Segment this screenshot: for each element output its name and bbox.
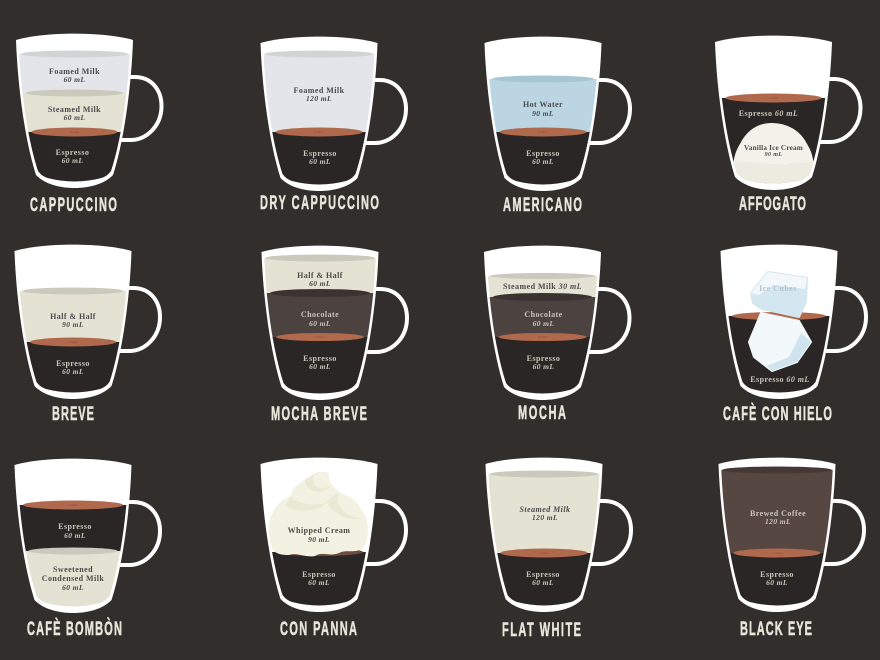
- mug: cappuccino: Espresso: [56, 148, 89, 157]
- mug: affogato: 90 mL: [765, 152, 782, 158]
- mug: cafe bombon: 60 mL: [62, 583, 84, 592]
- mug: black eye: 60 mL: [766, 578, 788, 587]
- mug: mocha breve: Half & Half: [297, 271, 343, 280]
- mug: mocha breve: 60 mL: [309, 362, 331, 371]
- title: dry cappuccino: DRY CAPPUCCINO: [260, 193, 379, 214]
- mug: dry cappuccino: 120 mL: [306, 94, 332, 103]
- mug: breve: Crema: [68, 340, 78, 344]
- mug: mocha breve: Crema: [315, 335, 325, 339]
- title: black eye: BLACK EYE: [740, 619, 812, 640]
- icon: ice cubes: [749, 272, 811, 371]
- mug: dry cappuccino: 60 mL: [309, 157, 331, 166]
- mug: dry cappuccino: Foamed Milk: [294, 86, 345, 95]
- mug: dry cappuccino: Crema: [314, 130, 324, 134]
- mug: affogato: [714, 36, 860, 193]
- mug: mocha breve: [260, 246, 407, 402]
- mug: black eye: [717, 458, 864, 615]
- mug: cafe bombon: Espresso: [58, 522, 92, 531]
- mug: cappuccino: Steamed Milk: [48, 105, 101, 114]
- title: breve: BREVE: [52, 404, 94, 425]
- mug: mocha breve: 60 mL: [309, 319, 331, 328]
- mug: americano: Espresso: [526, 149, 560, 158]
- mug: mocha: Espresso: [527, 354, 560, 363]
- mug: con panna: Whipped Cream: [288, 526, 350, 535]
- title: flat white: FLAT WHITE: [502, 620, 581, 641]
- title: con panna: CON PANNA: [280, 619, 357, 640]
- mug: breve: Half & Half: [50, 312, 96, 321]
- mug: cafe bombon: 60 mL: [64, 531, 86, 540]
- mug: flat white: [484, 458, 631, 615]
- title: affogato: AFFOGATO: [739, 194, 806, 215]
- icon: vanilla ice cream scoop: [734, 123, 814, 184]
- mug: black eye: Brewed Coffee: [750, 509, 806, 518]
- mug: mocha: [482, 246, 630, 402]
- title: cappuccino: CAPPUCCINO: [30, 195, 117, 216]
- mug: mocha breve: 60 mL: [309, 279, 331, 288]
- mug: mocha: Chocolate: [524, 310, 563, 319]
- mug: breve: Espresso: [56, 359, 90, 368]
- title: americano: AMERICANO: [503, 195, 582, 216]
- mug: flat white: Crema: [539, 551, 549, 555]
- mug: cafe bombon: Sweetened: [53, 565, 93, 574]
- mug: affogato: Vanilla Ice Cream: [744, 144, 803, 152]
- mug: cappuccino: Crema: [70, 130, 80, 134]
- mug: con panna: 60 mL: [308, 578, 330, 587]
- title: mocha: MOCHA: [518, 403, 566, 424]
- mug: cafe con hielo: Espresso 60 mL: [750, 375, 810, 384]
- mug: breve: 60 mL: [62, 367, 84, 376]
- mug: con panna: [259, 458, 406, 614]
- mug: black eye: Crema: [772, 551, 782, 555]
- mug: dry cappuccino: Espresso: [303, 149, 337, 158]
- mug: cappuccino: Foamed Milk: [49, 67, 100, 76]
- mug: cappuccino: [14, 34, 162, 192]
- mug: flat white: Steamed Milk: [520, 505, 570, 514]
- mug: americano: Hot Water: [523, 100, 563, 109]
- mug: mocha breve: Chocolate: [301, 310, 339, 319]
- mug: breve: 90 mL: [62, 320, 84, 329]
- mug: cappuccino: 60 mL: [62, 156, 83, 165]
- mug: mocha: 60 mL: [533, 319, 554, 328]
- mug: dry cappuccino: [259, 37, 406, 192]
- mug: americano: 60 mL: [532, 157, 554, 166]
- mug: mocha breve: Espresso: [303, 354, 337, 363]
- mug: black eye: 120 mL: [765, 517, 791, 526]
- icon: whipped cream: [268, 472, 368, 556]
- mug: con panna: Espresso: [302, 570, 336, 579]
- mug: americano: [483, 37, 630, 192]
- mug: flat white: 120 mL: [532, 513, 558, 522]
- title: cafe con hielo: CAFÈ CON HIELO: [723, 404, 832, 425]
- mug: cafe bombon: Crema: [68, 503, 78, 507]
- mug: flat white: Espresso: [526, 570, 560, 579]
- mug: affogato: Espresso 60 mL: [739, 109, 798, 118]
- mug: flat white: 60 mL: [532, 578, 554, 587]
- mug: con panna: 90 mL: [308, 535, 330, 544]
- mug: breve: [13, 245, 160, 402]
- mug: americano: 90 mL: [532, 109, 554, 118]
- mug: cappuccino: 60 mL: [64, 113, 85, 122]
- mug: mocha: 60 mL: [533, 362, 554, 371]
- title: cafe bombon: CAFÈ BOMBÒN: [27, 618, 122, 640]
- mug: mocha: Crema: [538, 335, 548, 339]
- mug: mocha: Steamed Milk 30 mL: [503, 282, 582, 291]
- mug: americano: Crema: [538, 130, 548, 134]
- mug: cafe con hielo: [719, 245, 866, 401]
- mug: cappuccino: 60 mL: [64, 75, 85, 84]
- mug: cafe bombon: Condensed Milk: [42, 574, 104, 583]
- mug: cafe bombon: [13, 459, 160, 616]
- mug: black eye: Espresso: [760, 570, 794, 579]
- mug: cafe con hielo: Ice Cubes: [759, 284, 797, 293]
- title: mocha breve: MOCHA BREVE: [271, 404, 367, 425]
- mug: affogato: Crema: [769, 96, 779, 100]
